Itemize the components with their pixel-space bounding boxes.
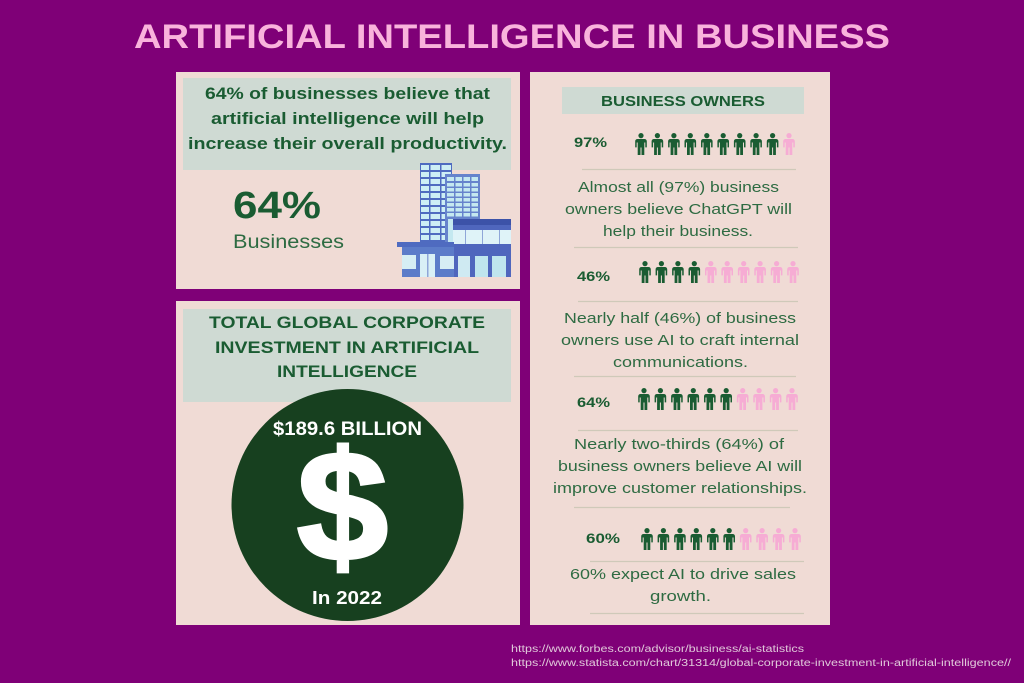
stat: 97% <box>565 133 798 248</box>
text 97: help their business. <box>603 224 753 240</box>
heading strip: productivity statement <box>183 78 511 170</box>
text 97: owners believe ChatGPT will <box>565 202 792 218</box>
label: Businesses: Businesses <box>233 232 344 253</box>
dollar circle <box>232 389 464 621</box>
text 97 <box>565 180 792 240</box>
text 46: communications. <box>613 355 748 371</box>
sources: https://www.forbes.com/advisor/business/ai-statistics <box>511 644 804 655</box>
text 46 <box>561 311 799 371</box>
heading strip: productivity statement: 64% of businesses believe that <box>205 84 490 103</box>
stat: 46% <box>561 261 799 376</box>
text 60: 60% expect AI to drive sales <box>570 567 796 583</box>
percent 60: 60% <box>586 530 621 546</box>
title: ARTIFICIAL INTELLIGENCE IN BUSINESS <box>134 18 890 56</box>
percent 46: 46% <box>577 268 611 284</box>
heading strip: productivity statement: increase their overall productivity. <box>188 134 507 153</box>
text 64: improve customer relationships. <box>553 481 807 497</box>
heading strip: total global corporate investment: TOTAL GLOBAL CORPORATE <box>209 313 485 332</box>
big number 64%: 64% <box>233 185 321 227</box>
text 64 <box>553 437 807 497</box>
text 64: business owners believe AI will <box>558 459 802 475</box>
heading: business owners <box>562 87 804 114</box>
pictogram 46 <box>639 261 799 283</box>
stat: 64% <box>553 388 807 508</box>
panel: 64% of businesses <box>176 72 520 289</box>
text 64: Nearly two-thirds (64%) of <box>574 437 785 453</box>
icon: office building <box>397 163 511 277</box>
text 60: growth. <box>650 589 711 605</box>
heading: business owners: BUSINESS OWNERS <box>601 94 765 110</box>
text 46: Nearly half (46%) of business <box>564 311 796 327</box>
heading strip: total global corporate investment <box>183 309 511 402</box>
panel: global corporate investment <box>176 301 520 625</box>
heading strip: total global corporate investment: INVESTMENT IN ARTIFICIAL <box>215 338 479 357</box>
pictogram 60 <box>641 528 801 550</box>
pictogram 64 <box>638 388 798 410</box>
sources: https://www.statista.com/chart/31314/global-corporate-investment-in-artificial-intelligence// <box>511 658 1011 669</box>
percent 64: 64% <box>577 394 611 410</box>
sources <box>511 644 1011 669</box>
text 60 <box>570 567 796 605</box>
panel: business owners <box>530 72 830 625</box>
pictogram 97 <box>635 133 795 155</box>
heading strip: productivity statement: artificial intelligence will help <box>211 109 484 128</box>
amount label: $189.6 BILLION <box>273 419 422 440</box>
heading strip: total global corporate investment: INTELLIGENCE <box>277 362 417 381</box>
percent 97: 97% <box>574 134 608 150</box>
stat: 60% <box>570 528 804 614</box>
text 46: owners use AI to craft internal <box>561 333 799 349</box>
year label: In 2022 <box>312 588 382 608</box>
text 97: Almost all (97%) business <box>578 180 779 196</box>
icon: dollar sign: $ <box>297 420 388 594</box>
